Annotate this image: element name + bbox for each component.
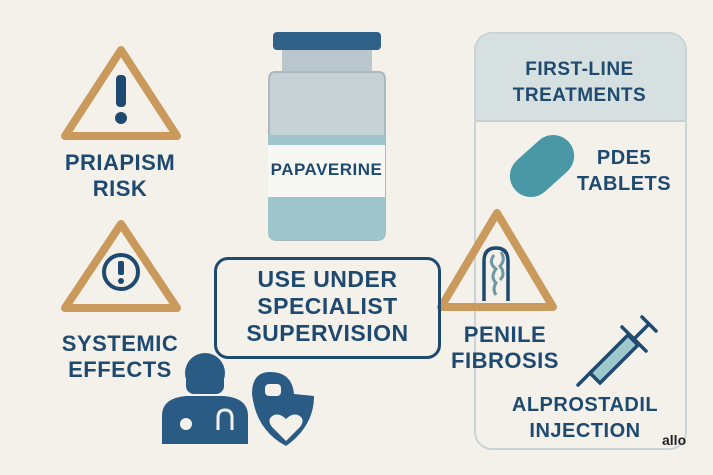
icon: warning priapism [65,50,177,136]
text: priapism risk: RISK [93,176,147,201]
text: pde5 tablets: PDE5 [597,147,651,169]
text: systemic effects: SYSTEMIC [62,331,178,356]
icon: pill [501,126,583,206]
text: supervision: SUPERVISION [246,320,409,346]
text: penile fibrosis [451,322,559,373]
icon: syringe [578,317,656,385]
heading: first-line treatments: FIRST-LINE [525,59,634,80]
text: supervision: SPECIALIST [257,293,398,319]
logo: allo: allo [662,432,686,448]
text: penile fibrosis: FIBROSIS [451,348,559,373]
text: alprostadil injection [512,394,658,442]
icon: warning systemic [65,224,177,308]
heading: first-line treatments [512,59,646,106]
panel: first-line treatments [474,32,687,450]
icon: papaverine bottle [268,32,385,240]
text: pde5 tablets [577,147,671,195]
label: papaverine: PAPAVERINE [271,160,382,179]
text: alprostadil injection: ALPROSTADIL [512,394,658,416]
text: priapism risk: PRIAPISM [65,150,175,175]
icon: doctor [162,353,248,444]
text: supervision [246,266,409,346]
text: systemic effects [62,331,178,382]
icon: shield heart [252,372,314,446]
icon: fibrosis warning [441,213,553,307]
text: pde5 tablets: TABLETS [577,173,671,195]
text: penile fibrosis: PENILE [464,322,546,347]
text: priapism risk [65,150,175,201]
heading: first-line treatments: TREATMENTS [513,85,646,106]
callout: specialist supervision [214,257,441,359]
text: supervision: USE UNDER [258,266,397,292]
panel header [476,34,685,122]
text: alprostadil injection: INJECTION [529,420,641,442]
text: systemic effects: EFFECTS [68,357,172,382]
